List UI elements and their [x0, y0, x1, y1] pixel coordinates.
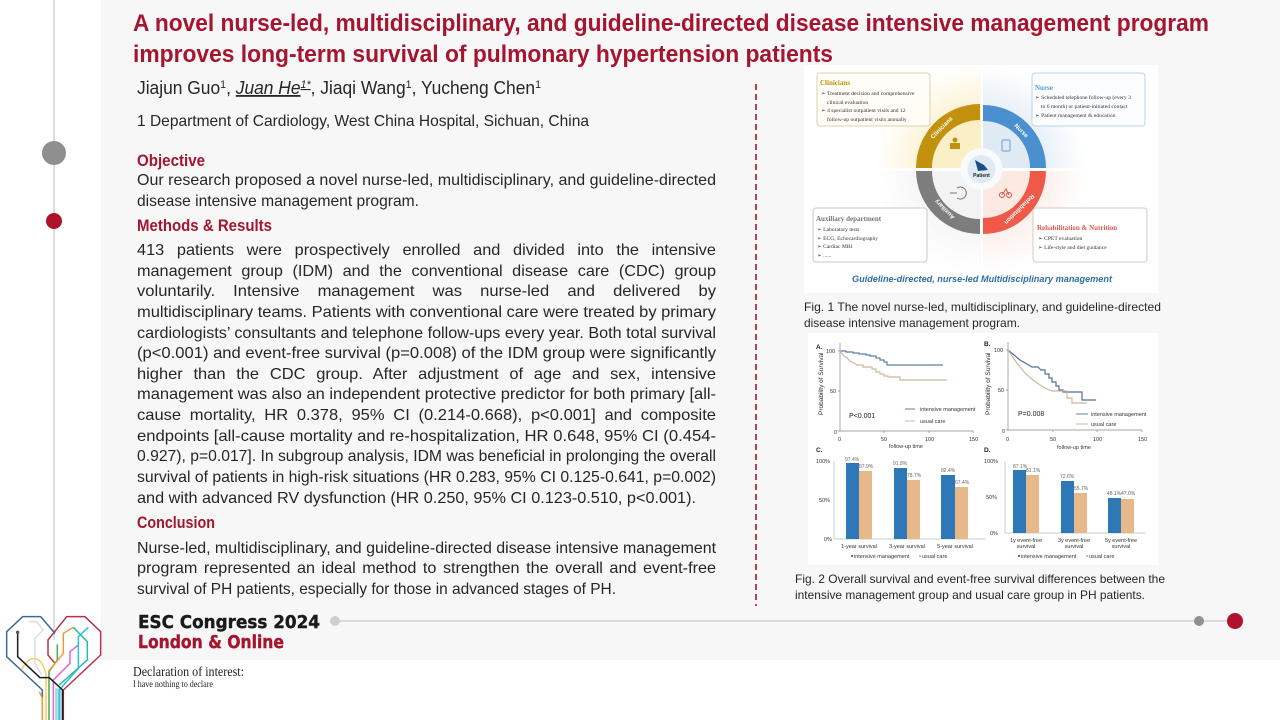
chart D: event-free survival bars: 1y event-free — [1010, 538, 1042, 544]
text: conclusion: survival of PH patients, especially for those in advanced stages of PH. — [137, 581, 616, 598]
light quadrant backgrounds — [876, 64, 1088, 275]
chart A: overall survival curves: intensive management — [920, 407, 976, 413]
chart D: event-free survival bars: 50% — [986, 495, 997, 501]
chart D: event-free survival bars: survival — [1065, 544, 1083, 550]
chart A: overall survival curves: 50 — [881, 437, 887, 443]
timeline decoration — [42, 0, 66, 640]
ring: clinicians — [916, 104, 980, 168]
chart B: event-free survival curves: 0 — [1006, 437, 1009, 443]
chart D: event-free survival bars: 48.1% — [1107, 491, 1122, 497]
figure 1 banner: Guideline-directed, nurse-led Multidisciplinary management — [852, 274, 1113, 284]
chart A: overall survival curves: 100 — [826, 349, 835, 355]
chart A: overall survival curves: usual care — [920, 419, 945, 425]
callout: auxiliary department: ➢ ...... — [817, 253, 832, 259]
title — [133, 10, 1209, 68]
heading: objective: Objective — [137, 152, 205, 170]
footer timeline — [330, 613, 1243, 629]
chart A: overall survival curves: Probability of Survival — [818, 352, 825, 415]
chart D: event-free survival bars: 81.1% — [1026, 468, 1041, 474]
caption: figure 1 — [804, 300, 1161, 330]
text: methods and results: voluntarily. Intensive management was nurse-led and delivered by — [137, 283, 716, 300]
text: objective: disease intensive management program. — [137, 193, 419, 210]
callout: rehabilitation and nutrition: ➢ Life-style and diet guidance — [1038, 244, 1107, 251]
chart B: event-free survival curves: B. — [984, 341, 991, 348]
chart B: event-free survival curves: 100 — [994, 348, 1003, 354]
chart C: survival bars — [816, 447, 985, 560]
authors: Juan He — [235, 78, 311, 98]
chart C: survival bars: 97.4% — [845, 457, 860, 463]
callout: auxiliary department — [813, 208, 927, 262]
chart D: event-free survival bars: 47.0% — [1121, 491, 1136, 497]
patient center: Patient — [973, 173, 990, 179]
text: conclusion: Nurse-led, multidisciplinary, and guideline-directed disease intensive management — [137, 540, 717, 557]
caption: figure 2: Fig. 2 Overall survival and event-free survival differences between the — [795, 572, 1165, 586]
text: objective — [137, 172, 716, 210]
caption: figure 2 — [795, 572, 1165, 602]
ring: nurse: Nurse — [1013, 123, 1029, 140]
text: methods and results — [137, 242, 716, 507]
chart C: survival bars: usual care — [922, 554, 947, 560]
callout: auxiliary department: ➢ Laboratory tests — [817, 227, 859, 233]
caption: figure 1: Fig. 1 The novel nurse-led, multidisciplinary, and guideline-directed — [804, 300, 1161, 314]
chart D: event-free survival bars: intensive management — [1021, 554, 1077, 560]
text: methods and results: cardiologists’ consultants and telephone follow-ups every year. Both total survival — [137, 325, 716, 342]
authors: , — [226, 78, 236, 98]
chart A: overall survival curves: 0 — [834, 430, 837, 436]
icon: rehabilitation bike — [1000, 189, 1012, 198]
callout: auxiliary department: ➢ Cardiac MRI — [817, 244, 853, 250]
callout: clinicians — [817, 73, 930, 126]
callout: clinicians: ➢ Treatment decision and comprehensive — [821, 91, 915, 97]
ring: clinicians: Clinicians — [930, 116, 955, 140]
callout: nurse: ➢ Patient management & education — [1035, 113, 1116, 119]
caption: figure 1: disease intensive management program. — [804, 316, 1020, 330]
logo: congress name — [138, 612, 320, 653]
text: methods and results: multidisciplinary teams. Patients with conventional care were treated by primary — [137, 304, 716, 321]
chart B: event-free survival curves: 0 — [1002, 429, 1005, 435]
text: methods and results: 0.927), p=0.017]. In subgroup analysis, IDM was beneficial in prolonging the overall — [137, 448, 716, 465]
chart B: event-free survival curves: intensive management — [1091, 412, 1147, 418]
icon: nurse phone — [1002, 140, 1010, 151]
callout: clinicians: Clinicians — [820, 79, 850, 87]
callout: nurse: Nurse — [1035, 84, 1053, 92]
chart A: overall survival curves: 100 — [925, 437, 934, 443]
ring: auxiliary: Auxiliary — [934, 197, 956, 220]
chart C: survival bars: 3-year survival — [889, 544, 925, 550]
chart C: survival bars: 82.4% — [941, 468, 956, 474]
authors: 1 — [535, 79, 541, 91]
authors: , Jiaqi Wang — [311, 78, 406, 98]
chart D: event-free survival bars: 55.7% — [1074, 486, 1089, 492]
chart B: event-free survival curves: P=0.008 — [1018, 411, 1044, 418]
chart B: event-free survival curves: 100 — [1093, 437, 1102, 443]
text: methods and results: higher than the CDC group. After adjustment of age and sex, intensive — [137, 366, 716, 383]
authors: , Yucheng Chen — [412, 78, 535, 98]
chart C: survival bars: 100% — [816, 459, 830, 465]
chart A: overall survival curves: follow-up time — [889, 444, 923, 450]
text: methods and results: and with advanced RV dysfunction (HR 0.250, 95% CI 0.123-0.510, p<0.001). — [137, 490, 696, 507]
ring: nurse — [983, 105, 1046, 168]
text: methods and results: management group (IDM) and the conventional disease care (CDC) group — [137, 263, 716, 280]
title: A novel nurse-led, multidisciplinary, and guideline-directed disease intensive management program — [133, 10, 1209, 37]
callout: clinicians: follow-up outpatient visits annually — [827, 116, 907, 123]
text: methods and results: management was also an independent protective predictor for both primary [all- — [137, 386, 716, 403]
logo: congress name: London & Online — [138, 632, 284, 653]
ring: rehabilitation: Rehabilitation — [1002, 193, 1035, 225]
chart B: event-free survival curves: Probability of Survival — [985, 352, 992, 415]
chart D: event-free survival bars: 100% — [984, 459, 998, 465]
authors: 1 — [220, 79, 226, 91]
chart C: survival bars: 87.9% — [859, 464, 874, 470]
ring: rehabilitation — [983, 171, 1046, 234]
chart A: overall survival curves: A. — [816, 344, 823, 351]
declaration of interest: Declaration of interest: — [133, 665, 244, 680]
text: objective: Our research proposed a novel nurse-led, multidisciplinary, and guideline-directed — [137, 172, 716, 189]
callout: clinicians: ➢ 4 specialist outpatient visits and 12 — [821, 108, 906, 114]
declaration of interest: I have nothing to declare — [133, 680, 213, 690]
chart D: event-free survival bars: D. — [984, 447, 991, 454]
callout: nurse — [1032, 73, 1145, 126]
text: conclusion — [137, 540, 717, 598]
text: methods and results: cause mortality, HR 0.378, 95% CI (0.214-0.668), p<0.001] and composite — [137, 407, 716, 424]
chart C: survival bars: 5-year survival — [937, 544, 973, 550]
chart C: survival bars: 50% — [819, 498, 830, 504]
callout: rehabilitation and nutrition: ➢ CPET evaluation — [1038, 236, 1083, 242]
chart D: event-free survival bars: usual care — [1089, 554, 1114, 560]
callout: auxiliary department: Auxiliary department — [816, 215, 882, 223]
chart D: event-free survival bars: 0% — [990, 531, 998, 537]
ring: auxiliary — [916, 171, 980, 234]
chart C: survival bars: 0% — [824, 537, 832, 543]
chart D: event-free survival bars: survival — [1112, 544, 1130, 550]
text: methods and results: (p<0.001) and event-free survival (p=0.008) of the IDM group were significantly — [137, 345, 716, 362]
text: methods and results: survival of patients in high-risk situations (HR 0.283, 95% CI 0.125-0.641, p=0.002) — [137, 469, 716, 486]
chart C: survival bars: 67.4% — [955, 480, 970, 486]
figure 1: multidisciplinary management diagram — [804, 64, 1158, 293]
callout: auxiliary department: ➢ ECG, Echocardiography — [817, 236, 878, 242]
declaration of interest — [133, 665, 244, 690]
figure 2 background — [808, 333, 1158, 565]
chart B: event-free survival curves: 150 — [1138, 437, 1147, 443]
affiliation: 1 Department of Cardiology, West China Hospital, Sichuan, China — [137, 113, 589, 130]
chart B: event-free survival curves: usual care — [1091, 422, 1116, 428]
caption: figure 2: intensive management group and usual care group in PH patients. — [795, 588, 1145, 602]
chart D: event-free survival bars: 3y event-free — [1058, 538, 1090, 544]
authors: 1 — [406, 79, 412, 91]
chart A: overall survival curves — [816, 343, 978, 450]
patient center — [960, 148, 1002, 190]
logo: congress name: ESC Congress 2024 — [138, 612, 320, 633]
chart B: event-free survival curves: 50 — [1050, 437, 1056, 443]
chart C: survival bars: 91.8% — [893, 461, 908, 467]
icon: auxiliary test — [950, 187, 966, 199]
chart B: event-free survival curves — [984, 341, 1147, 451]
chart D: event-free survival bars: 5y event-free — [1105, 538, 1137, 544]
title: improves long-term survival of pulmonary hypertension patients — [133, 41, 833, 68]
authors: Jiajun Guo — [137, 78, 223, 98]
chart D: event-free survival bars: survival — [1017, 544, 1035, 550]
text: conclusion: program represented an ideal method to strengthen the overall and event-free — [137, 560, 716, 577]
callout: rehabilitation and nutrition: Rehabilitation & Nutrition — [1037, 224, 1117, 232]
logo: heart of circuit lines — [7, 617, 101, 720]
callout: nurse: ➢ Scheduled telephone follow-up (every 3 — [1035, 94, 1131, 101]
chart C: survival bars: C. — [816, 447, 823, 454]
callout: rehabilitation and nutrition — [1033, 208, 1147, 262]
heading: conclusion: Conclusion — [137, 514, 215, 532]
chart B: event-free survival curves: follow-up time — [1057, 445, 1091, 451]
chart D: event-free survival bars: 72.6% — [1060, 474, 1075, 480]
text: methods and results: 413 patients were prospectively enrolled and divided into the intensive — [137, 242, 716, 259]
authors: 1* — [301, 79, 311, 91]
chart C: survival bars: intensive management — [854, 554, 910, 560]
chart B: event-free survival curves: 50 — [998, 388, 1004, 394]
chart C: survival bars: 78.7% — [907, 473, 922, 479]
text: methods and results: endpoints [all-cause mortality and re-hospitalization, HR 0.648, 95% CI (0.454- — [137, 428, 716, 445]
chart C: survival bars: 1-year survival — [841, 544, 877, 550]
chart A: overall survival curves: P<0.001 — [849, 413, 875, 420]
chart D: event-free survival bars — [984, 447, 1145, 560]
callout: nurse: to 6 month) or patient-initiated contact — [1041, 103, 1128, 110]
chart D: event-free survival bars: 87.1% — [1013, 464, 1028, 470]
chart A: overall survival curves: 0 — [838, 437, 841, 443]
callout: clinicians: clinical evaluation — [827, 100, 868, 106]
chart A: overall survival curves: 50 — [830, 389, 836, 395]
heading: methods and results: Methods & Results — [137, 217, 272, 235]
chart A: overall survival curves: 150 — [969, 437, 978, 443]
icon: clinician — [950, 138, 960, 149]
